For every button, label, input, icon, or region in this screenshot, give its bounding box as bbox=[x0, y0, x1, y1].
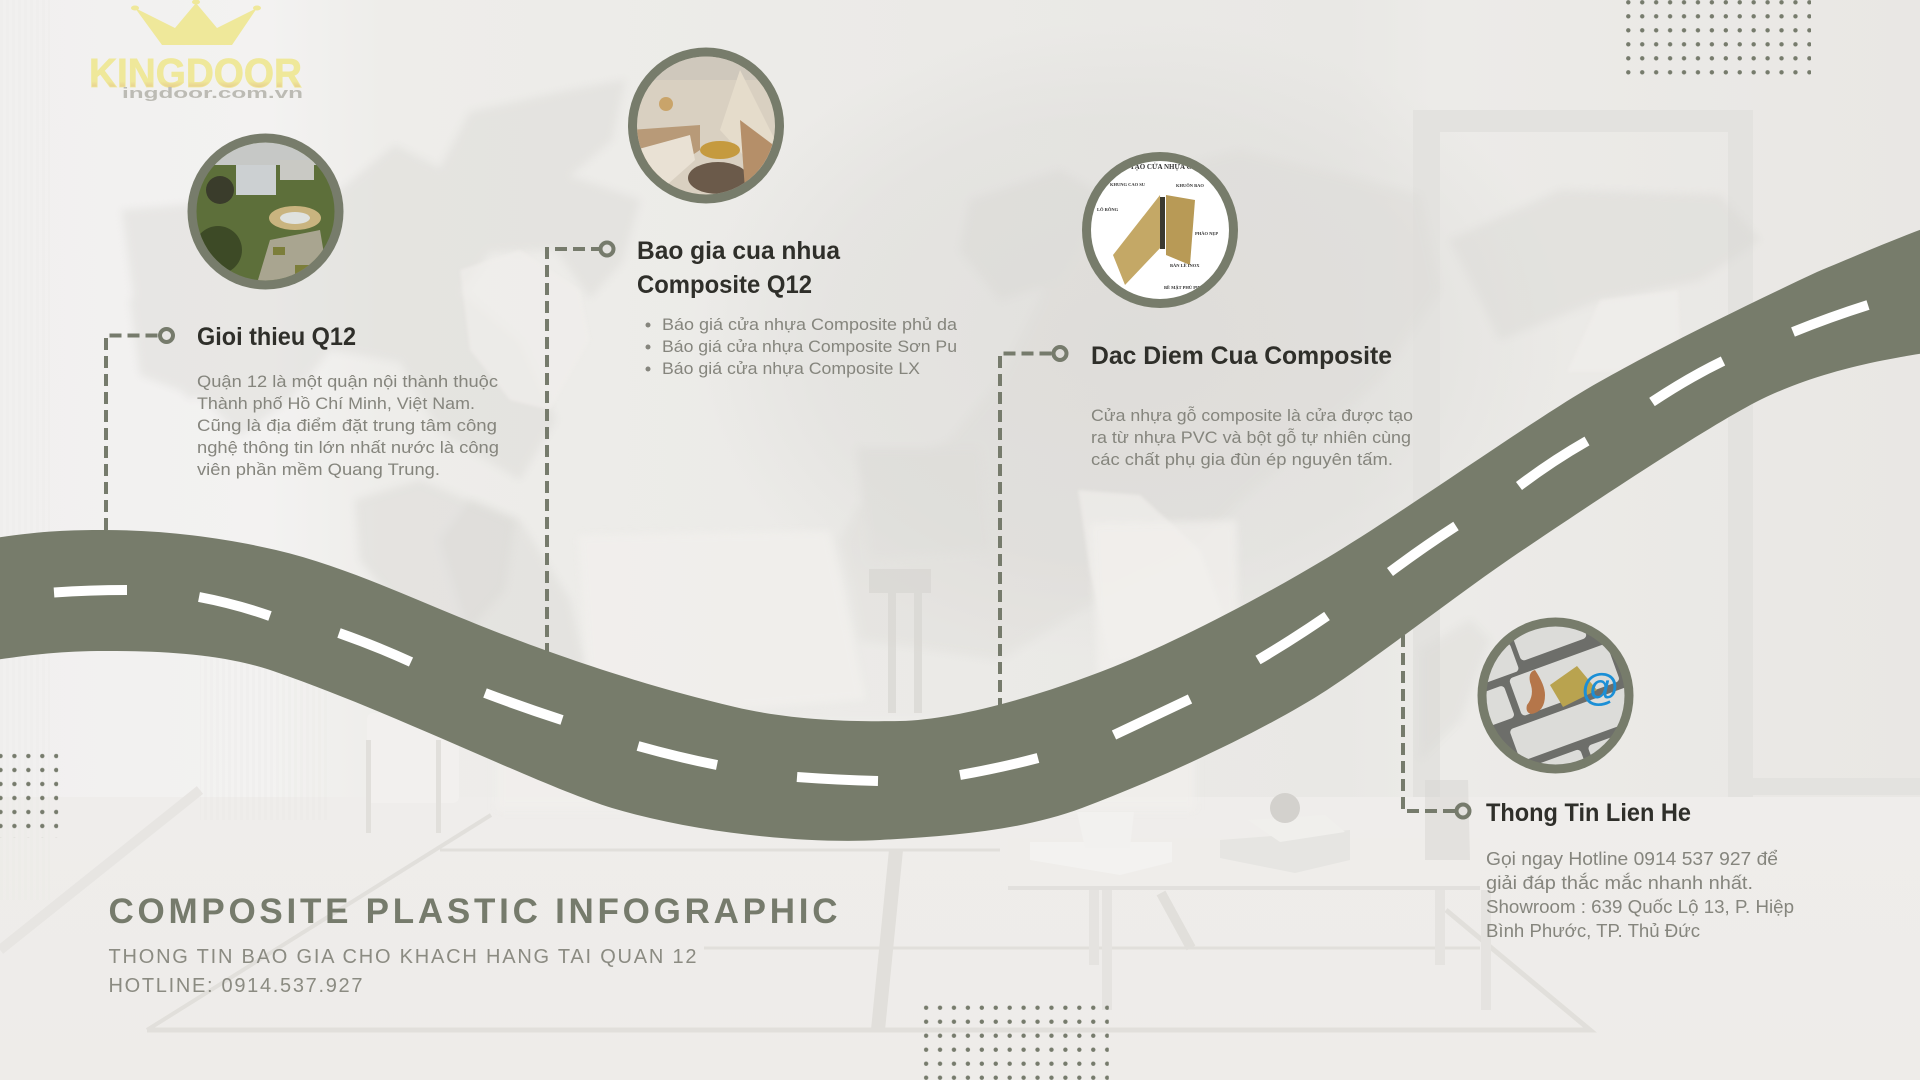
photo circle: keyboard contact bbox=[1478, 618, 1634, 774]
text block: step 1 bbox=[197, 372, 499, 479]
photo circle: composite door diagram: PHÀO NẸP bbox=[1195, 231, 1218, 236]
photo circle: keyboard contact: @ bbox=[1581, 667, 1619, 709]
text block: step 3: Cửa nhựa gỗ composite là cửa được tạo bbox=[1091, 406, 1413, 425]
photo circle: aerial park bbox=[188, 134, 344, 290]
text block: step 3 bbox=[1091, 406, 1413, 469]
subtitle bbox=[108, 946, 696, 997]
bullet list: step 2 bbox=[646, 315, 958, 378]
coffee table and books bbox=[1008, 780, 1486, 1010]
dot grid: top right bbox=[1626, 0, 1811, 75]
heading: step 1: Gioi thieu Q12 bbox=[197, 323, 356, 351]
connector: step 3 bbox=[1000, 347, 1066, 710]
road bbox=[0, 228, 1920, 841]
photo circle: living room bbox=[628, 48, 785, 205]
text block: step 4 bbox=[1486, 849, 1794, 941]
heading: step 4: Thong Tin Lien He bbox=[1486, 799, 1691, 827]
planter bbox=[355, 480, 515, 833]
icon: crown bbox=[131, 0, 261, 45]
text block: step 1: Quận 12 là một quận nội thành thuộc bbox=[197, 372, 499, 391]
logo domain: ingdoor.com.vn bbox=[122, 85, 303, 102]
connector: step 4 bbox=[1403, 635, 1470, 818]
heading: step 2 bbox=[637, 237, 841, 299]
road centre dashes bbox=[54, 305, 1868, 781]
text block: step 3: ra từ nhựa PVC và bột gỗ tự nhiên cùng bbox=[1091, 428, 1411, 447]
panel: step 4 text bbox=[1486, 799, 1794, 941]
connector: step 1 bbox=[106, 329, 173, 530]
rug outlines bbox=[0, 790, 1590, 1030]
logo wordmark: KINGDOOR bbox=[89, 50, 302, 96]
photo circle: composite door diagram: TẠO CỬA NHỰA CO bbox=[1130, 163, 1198, 171]
text block: step 4: Gọi ngay Hotline 0914 537 927 để bbox=[1486, 849, 1778, 869]
bullet list: step 2: Báo giá cửa nhựa Composite Sơn Pu bbox=[662, 337, 957, 356]
heading: step 2: Composite Q12 bbox=[637, 271, 812, 299]
sofa and cushions bbox=[496, 520, 1240, 810]
photo circle: composite door diagram: BẢN LỀ INOX bbox=[1170, 263, 1200, 268]
text block: step 3: các chất phụ gia đùn ép nguyên tấm. bbox=[1091, 450, 1393, 469]
text block: step 1: nghệ thông tin lớn nhất nước là công bbox=[197, 438, 499, 457]
photo circle: composite door diagram: BỀ MẶT PHỦ PHIM bbox=[1164, 285, 1206, 290]
subtitle: THONG TIN BAO GIA CHO KHACH HANG TAI QUAN 12 bbox=[108, 946, 696, 968]
text block: step 1: Thành phố Hồ Chí Minh, Việt Nam. bbox=[197, 394, 475, 413]
dot grid: left bbox=[0, 754, 58, 838]
photo circle: composite door diagram: KHUÔN BAO bbox=[1176, 183, 1204, 188]
bullet list: step 2: Báo giá cửa nhựa Composite LX bbox=[662, 359, 920, 378]
window frame bbox=[1413, 110, 1920, 797]
connector: step 2 bbox=[547, 242, 614, 655]
heading: step 2: Bao gia cua nhua bbox=[637, 237, 841, 265]
panel: step 1 text bbox=[197, 323, 499, 479]
dot grid: bottom centre bbox=[924, 1005, 1109, 1080]
world map silhouettes bbox=[122, 80, 1760, 760]
panel: step 3 text bbox=[1091, 342, 1413, 469]
logo: Kingdoor bbox=[89, 0, 303, 102]
photo circle: composite door diagram: LỖ RỖNG bbox=[1097, 207, 1119, 212]
panel: step 2 text bbox=[637, 237, 958, 378]
text block: step 4: giải đáp thắc mắc nhanh nhất. bbox=[1486, 872, 1753, 893]
bullet list: step 2: Báo giá cửa nhựa Composite phủ da bbox=[662, 315, 958, 334]
text block: step 4: Bình Phước, TP. Thủ Đức bbox=[1486, 921, 1700, 941]
side table and lamp stand bbox=[869, 569, 931, 713]
text block: step 1: viên phần mềm Quang Trung. bbox=[197, 460, 440, 479]
title: COMPOSITE PLASTIC INFOGRAPHIC bbox=[108, 892, 838, 931]
subtitle: HOTLINE: 0914.537.927 bbox=[108, 975, 362, 997]
text block: step 4: Showroom : 639 Quốc Lộ 13, P. Hiệp bbox=[1486, 897, 1794, 917]
light continents bbox=[460, 250, 1680, 660]
heading: step 3: Dac Diem Cua Composite bbox=[1091, 342, 1392, 370]
text block: step 1: Cũng là địa điểm đặt trung tâm công bbox=[197, 416, 497, 435]
photo circle: composite door diagram bbox=[1082, 152, 1238, 308]
photo circle: composite door diagram: KHUNG CAO SU bbox=[1110, 182, 1146, 187]
